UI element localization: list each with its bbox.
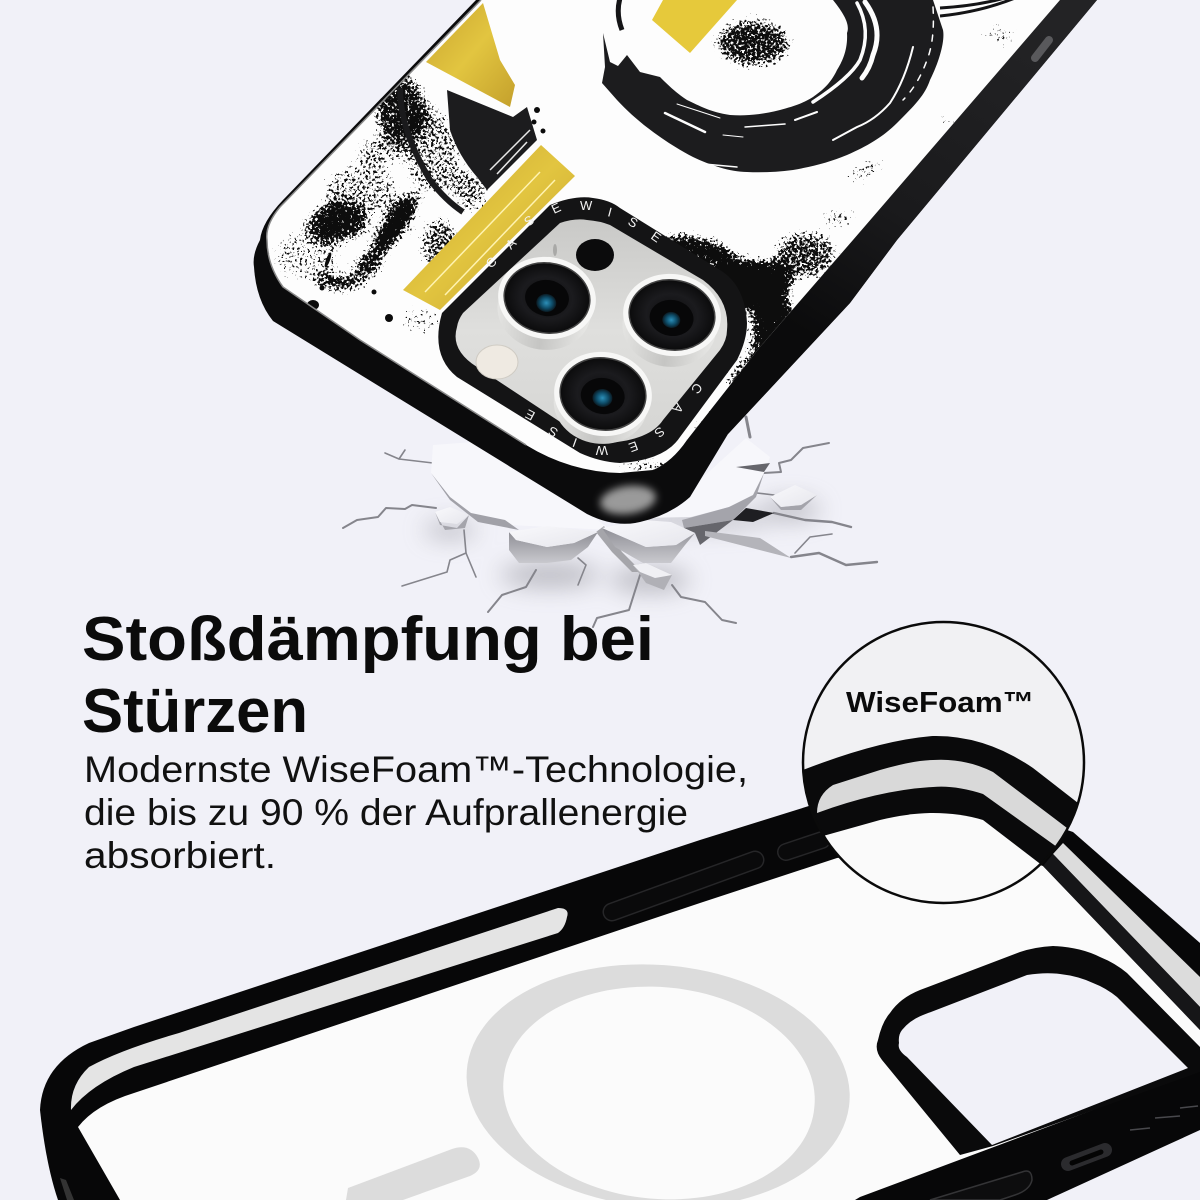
lens one (491, 251, 601, 356)
lens two (616, 268, 726, 373)
case outer frame (40, 790, 1200, 1200)
foam channel left (71, 908, 568, 1110)
gold stroke highlights (425, 172, 555, 295)
headline line one: Stoßdämpfung bei (82, 605, 654, 674)
inner rim right (1043, 854, 1200, 1030)
clear back panel (78, 840, 1200, 1200)
magnifier callout (802, 620, 1086, 904)
headline (82, 605, 654, 746)
flash (476, 345, 518, 379)
gold strokes (403, 0, 737, 310)
lidar sensor (576, 239, 614, 271)
brush arc white scratches (665, 2, 933, 167)
black brush wedge (447, 90, 537, 190)
magnifier label: WiseFoam™ (846, 687, 1034, 719)
small rocks (435, 485, 817, 590)
crack lines (343, 417, 877, 627)
description line one: Modernste WiseFoam™-Technologie, (84, 749, 748, 790)
case artwork (250, 0, 1080, 480)
corner highlight (598, 482, 658, 518)
lower right wedge (705, 531, 791, 558)
camera cutout opening (899, 973, 1188, 1145)
frame streaks (1130, 1106, 1198, 1130)
left side slot (60, 1178, 74, 1200)
side button highlight (1035, 40, 1049, 58)
splatter drops (307, 107, 546, 322)
magnifier outline (803, 622, 1084, 903)
side buttons (612, 840, 822, 912)
side rim right (728, 0, 1097, 434)
foam channel right (1053, 843, 1200, 1007)
camera cutout frame (877, 946, 1200, 1155)
camera plate (456, 219, 727, 443)
impact shadow (424, 500, 820, 592)
lower button (930, 1171, 1032, 1200)
thin brush arc (400, 88, 463, 212)
thin inner circle (618, 0, 622, 30)
magnetic alignment bar (346, 1147, 480, 1200)
chunk center (602, 520, 695, 563)
bumper brand text bottom: CASEWISE (522, 380, 706, 458)
lens three (548, 346, 657, 450)
description line two: die bis zu 90 % der Aufprallenergie (84, 792, 688, 833)
microphone (553, 244, 557, 256)
cracked ground impact (343, 417, 877, 627)
phone with artistic case, tilted (250, 0, 1097, 524)
top right thin arcs (940, 0, 1015, 16)
magnified content (804, 736, 1077, 864)
clear case interior view (40, 790, 1200, 1200)
headline line two: Stürzen (82, 677, 308, 746)
chunk left (509, 526, 598, 563)
wedge scratches (490, 130, 530, 174)
large black brush arc (602, 0, 943, 172)
right plate (640, 438, 774, 545)
inner edge highlight (267, 0, 526, 445)
description line three: absorbiert. (84, 835, 276, 876)
bumper brand text top: CASEWISE (483, 198, 664, 271)
paint splatter (269, 17, 1022, 472)
magnetic ring (467, 964, 850, 1200)
camera bumper (438, 197, 747, 463)
case body (254, 0, 1097, 524)
lower port (1068, 1150, 1105, 1164)
central crack wedge (596, 526, 642, 572)
description text (84, 749, 748, 876)
left plate (431, 440, 610, 530)
